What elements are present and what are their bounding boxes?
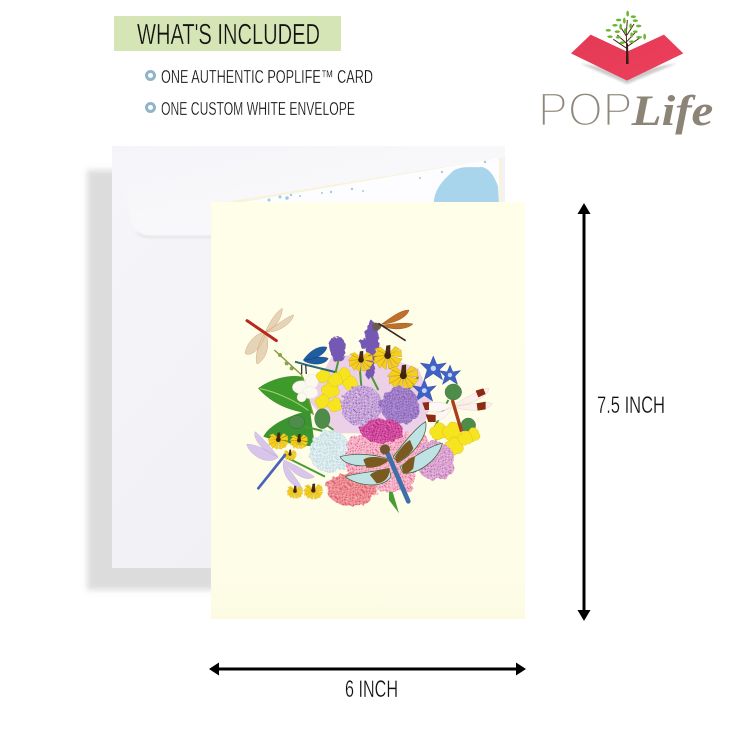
dragonfly left lilac bbox=[247, 432, 314, 488]
list item: envelope bbox=[146, 98, 355, 119]
envelope flap bbox=[112, 146, 505, 236]
envelope shadow bbox=[87, 170, 215, 590]
envelope bbox=[112, 146, 505, 568]
hydrangea white bbox=[309, 430, 351, 473]
allium violet bbox=[381, 387, 419, 425]
icon: blue watercolor blob bbox=[434, 167, 499, 204]
white flowers bbox=[292, 374, 318, 402]
list item: envelope: ONE CUSTOM WHITE ENVELOPE bbox=[161, 98, 355, 119]
coral cluster bbox=[327, 473, 377, 506]
dragonfly top right bbox=[372, 310, 413, 341]
label: 7.5 inch: 7.5 INCH bbox=[597, 392, 665, 419]
bouquet illustration bbox=[245, 308, 492, 513]
icon: tree bbox=[606, 11, 646, 64]
title: what's included bbox=[114, 16, 341, 51]
black-eyed susans bbox=[268, 345, 419, 500]
pink milkweed bbox=[345, 427, 432, 492]
magenta cluster bbox=[360, 419, 403, 443]
yellow blossoms bbox=[315, 368, 480, 456]
inserted card: watercolor back bbox=[214, 156, 502, 204]
dragonfly right with banded wings bbox=[422, 388, 492, 432]
title: what's included: WHAT'S INCLUDED bbox=[137, 19, 320, 51]
list item: card bbox=[146, 66, 373, 87]
wordmark: pop: POP bbox=[538, 83, 633, 136]
lavender spikes bbox=[330, 321, 378, 380]
logo: poplife bbox=[538, 11, 713, 136]
blue gentian flowers bbox=[412, 356, 461, 401]
leaves bbox=[258, 347, 468, 513]
list item: card: ONE AUTHENTIC POPLIFE™ CARD bbox=[161, 66, 373, 87]
arrow: width dimension bbox=[209, 662, 526, 676]
green buds bbox=[289, 384, 476, 433]
greeting card front bbox=[211, 202, 525, 619]
pale pink backdrop bbox=[308, 353, 432, 433]
wordmark: life: Life bbox=[631, 87, 713, 135]
damselfly blue bbox=[295, 347, 335, 374]
label: 6 inch: 6 INCH bbox=[345, 676, 398, 703]
arrow: height dimension bbox=[578, 203, 590, 621]
icon: red open book bbox=[571, 35, 683, 81]
mauve cluster bbox=[416, 441, 454, 480]
large dragonfly center bbox=[340, 422, 442, 501]
allium pale purple bbox=[341, 385, 382, 427]
dragonfly top left bbox=[245, 308, 294, 364]
